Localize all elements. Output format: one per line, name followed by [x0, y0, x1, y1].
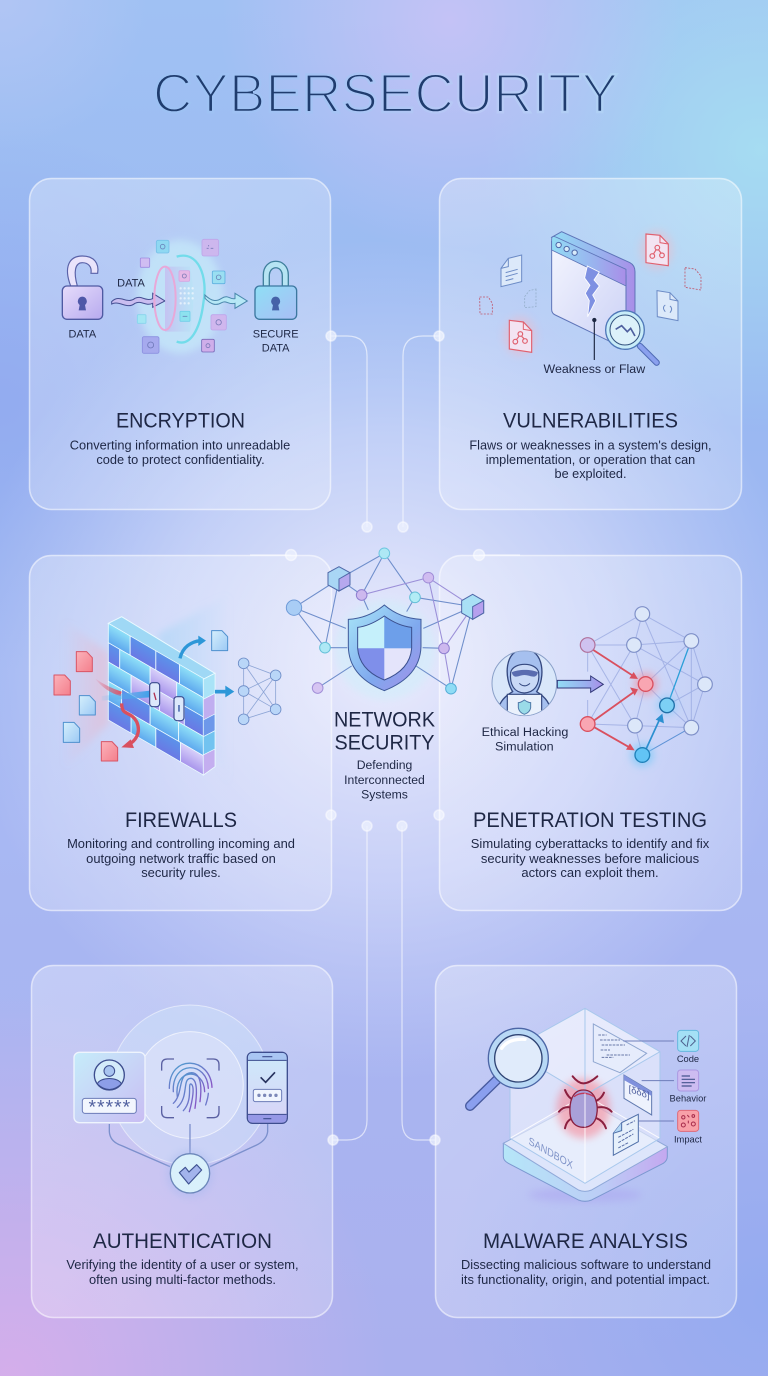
- shield: [348, 605, 421, 691]
- brick wall: [108, 617, 215, 775]
- heading: network security: [334, 708, 436, 754]
- description: authentication: Verifying the identity of a user or system,: [66, 1257, 299, 1272]
- authentication illustration: [74, 1005, 287, 1197]
- panel: authentication: [32, 966, 332, 1318]
- vulnerabilities illustration: Weakness or Flaw: [543, 362, 645, 376]
- description: malware analysis: its functionality, origin, and potential impact.: [461, 1272, 710, 1287]
- penetration testing illustration: Ethical Hacking: [482, 725, 568, 739]
- description: authentication: often using multi-factor methods.: [89, 1272, 276, 1287]
- heading: authentication: AUTHENTICATION: [93, 1229, 272, 1253]
- heading: encryption: ENCRYPTION: [116, 408, 245, 432]
- panel: encryption: [30, 178, 330, 510]
- connector lines: [250, 331, 520, 1145]
- description: malware analysis: [461, 1257, 711, 1287]
- description: vulnerabilities: [469, 438, 712, 481]
- description: firewalls: outgoing network traffic based on: [86, 851, 276, 866]
- description: vulnerabilities: implementation, or operation that can: [486, 453, 695, 467]
- connectors: [109, 1124, 268, 1167]
- penetration testing illustration: Simulation: [495, 740, 554, 754]
- subtitle: network security: Defending: [357, 758, 412, 772]
- glass cube: [510, 1008, 660, 1183]
- phone: [247, 1052, 287, 1123]
- description: vulnerabilities: be exploited.: [555, 467, 626, 481]
- window: [δδδ]: [629, 1084, 649, 1102]
- verified check: [167, 1151, 213, 1197]
- heading: penetration testing: PENETRATION TESTING: [473, 808, 707, 832]
- hexagon nodes: [328, 567, 484, 619]
- red file icons: [503, 230, 673, 356]
- fingerprint: [162, 1059, 219, 1118]
- network mesh: [588, 614, 705, 755]
- description: encryption: code to protect confidentiality.: [96, 452, 265, 467]
- firewall illustration: [54, 593, 281, 790]
- network graph: [286, 548, 484, 700]
- title: CYBERSECURITY: [153, 63, 618, 124]
- encryption illustration: DATA: [68, 329, 97, 341]
- panel: vulnerabilities: [440, 178, 742, 510]
- arrow: [557, 676, 603, 692]
- description: authentication: [66, 1257, 299, 1287]
- description: malware analysis: Dissecting malicious software to understand: [461, 1257, 711, 1272]
- description: encryption: [70, 438, 290, 467]
- heading: vulnerabilities: VULNERABILITIES: [503, 408, 678, 432]
- behavior icon: Behavior: [670, 1094, 706, 1104]
- impact icon: Impact: [674, 1134, 702, 1144]
- description: firewalls: security rules.: [141, 865, 221, 880]
- description: firewalls: [67, 836, 295, 880]
- penetration testing illustration: [482, 607, 712, 767]
- central hub: network security: [286, 548, 484, 802]
- window: [624, 1075, 652, 1115]
- code sheet: [593, 1024, 647, 1073]
- panel: firewalls: [30, 556, 332, 910]
- user card: *****: [88, 1097, 131, 1118]
- description: firewalls: Monitoring and controlling incoming and: [67, 836, 295, 851]
- report doc: [613, 1114, 638, 1155]
- description: penetration testing: security weaknesses before malicious: [481, 851, 700, 866]
- heading: network security: SECURITY: [334, 730, 434, 754]
- dashed file outlines: [480, 268, 701, 314]
- heading: firewalls: FIREWALLS: [125, 808, 237, 832]
- callouts: [623, 1030, 706, 1144]
- encryption illustration: SECURE: [253, 329, 299, 341]
- bug: [559, 1076, 612, 1128]
- subtitle: network security: Systems: [361, 788, 408, 802]
- description: penetration testing: [471, 836, 710, 880]
- panel: penetration testing: [440, 556, 742, 910]
- malware illustration: SANDBOX: [528, 1135, 573, 1172]
- sandbox base: [503, 1100, 667, 1202]
- description: penetration testing: Simulating cyberattacks to identify and fix: [471, 836, 710, 851]
- hacker: [492, 649, 557, 718]
- malware illustration: [470, 1008, 706, 1202]
- user card: [74, 1052, 145, 1123]
- panel: malware analysis: [436, 966, 736, 1318]
- subtitle: network security: Interconnected: [344, 773, 425, 787]
- heading: network security: NETWORK: [334, 708, 436, 732]
- blue file icons: [501, 255, 678, 321]
- subtitle: network security: [344, 758, 425, 802]
- description: vulnerabilities: Flaws or weaknesses in a system's design,: [469, 438, 712, 452]
- vulnerabilities illustration: [480, 230, 701, 376]
- description: encryption: Converting information into unreadable: [70, 438, 290, 452]
- encryption illustration: DATA: [262, 342, 290, 354]
- description: penetration testing: actors can exploit them.: [521, 865, 659, 880]
- encryption illustration: [62, 239, 299, 354]
- encryption illustration: DATA: [117, 278, 145, 290]
- code icon: Code: [677, 1054, 699, 1064]
- heading: malware analysis: MALWARE ANALYSIS: [483, 1229, 688, 1253]
- magnifier: [470, 1028, 548, 1106]
